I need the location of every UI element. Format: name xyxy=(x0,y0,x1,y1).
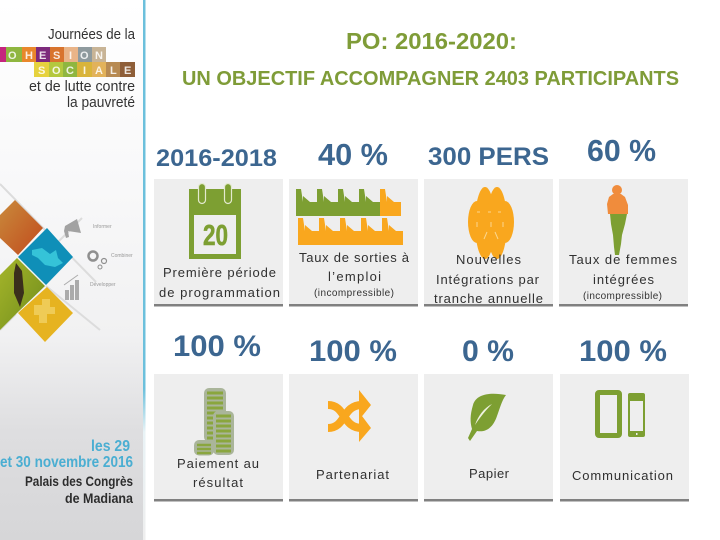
label xyxy=(177,456,259,490)
label xyxy=(299,250,410,299)
logo blocks: sociale: C xyxy=(66,65,74,77)
event logo xyxy=(0,26,136,111)
icon: group of people xyxy=(468,187,514,259)
panel: left sidebar xyxy=(0,0,146,540)
puzzle diamond: yellow xyxy=(18,287,73,342)
title: PO: 2016-2020: xyxy=(346,28,517,54)
icon: coin stacks xyxy=(194,388,234,456)
logo blocks: sociale xyxy=(34,62,135,77)
heading: 100 % paiement: 100 % xyxy=(173,330,261,363)
label: Partenariat xyxy=(316,467,389,482)
heading: 0 % papier: 0 % xyxy=(462,335,514,368)
logo blocks: sociale: A xyxy=(95,65,103,77)
label: (incompressible) xyxy=(583,291,662,302)
icon: leaf xyxy=(468,394,506,441)
icon: factories xyxy=(296,189,403,245)
logo blocks: sociale: O xyxy=(52,65,61,77)
logo heading: Journées de la xyxy=(48,26,136,43)
logo blocks: sociale: I xyxy=(83,65,86,77)
label: Communication xyxy=(572,468,673,483)
label: Intégrations par xyxy=(436,272,540,287)
label: Nouvelles xyxy=(456,252,522,267)
panel: première période xyxy=(154,179,283,306)
logo blocks: cohésion: H xyxy=(25,50,33,62)
icon: gears xyxy=(88,252,106,269)
logo blocks: cohésion: S xyxy=(53,50,60,62)
icon: calendar: 20 xyxy=(203,220,228,252)
label: combiner: Combiner xyxy=(111,253,133,259)
event date and venue xyxy=(0,438,133,506)
heading: 2016-2018: 2016-2018 xyxy=(156,145,277,172)
logo blocks: sociale: E xyxy=(124,65,131,77)
logo blocks: cohésion: I xyxy=(69,50,72,62)
label xyxy=(569,252,678,302)
date: les 29 xyxy=(91,438,130,455)
venue: de Madiana xyxy=(65,490,133,506)
date: et 30 novembre 2016 xyxy=(0,454,133,471)
icon: megaphone xyxy=(64,219,81,238)
sidebar diamond graphic xyxy=(0,184,133,342)
label: résultat xyxy=(193,475,243,490)
logo subtitle xyxy=(29,78,135,111)
panel: paiement au résultat xyxy=(154,374,283,502)
label: Taux de sorties à xyxy=(299,250,410,265)
icon: shuffle arrows xyxy=(328,390,371,442)
label: (incompressible) xyxy=(314,288,394,299)
photo diamond: green xyxy=(0,258,45,330)
label: Taux de femmes xyxy=(569,252,678,267)
date xyxy=(0,438,133,471)
label: tranche annuelle xyxy=(434,291,543,306)
subtitle: UN OBJECTIF ACCOMPAGNER 2403 PARTICIPANTS xyxy=(182,68,679,90)
label xyxy=(434,252,543,306)
map diamond: blue xyxy=(18,228,73,285)
logo blocks: cohésion xyxy=(0,47,106,62)
panel: papier xyxy=(424,374,553,502)
logo subtitle: et de lutte contre xyxy=(29,78,135,95)
icon: woman figure xyxy=(607,185,628,255)
heading: 40 %: 40 % xyxy=(318,137,388,172)
panel: nouvelles intégrations xyxy=(424,179,553,306)
label: de programmation xyxy=(159,285,280,300)
heading: 300 PERS: 300 PERS xyxy=(428,143,549,171)
label xyxy=(159,265,280,300)
label: Papier xyxy=(469,466,510,481)
label: intégrées xyxy=(593,272,654,287)
logo blocks: cohésion: N xyxy=(95,50,103,62)
panel: partenariat xyxy=(289,374,418,502)
logo subtitle: la pauvreté xyxy=(67,94,135,111)
venue: Palais des Congrès xyxy=(25,473,133,489)
label: informer: Informer xyxy=(93,224,112,230)
label: l’emploi xyxy=(328,269,381,284)
logo blocks: sociale: S xyxy=(38,65,45,77)
label: Paiement au xyxy=(177,456,259,471)
label: développer: Développer xyxy=(90,282,116,288)
photo diamond: hands xyxy=(0,200,43,255)
heading: 100 % communication: 100 % xyxy=(579,335,667,368)
icon: growth chart xyxy=(64,275,79,300)
panel: communication xyxy=(560,374,689,502)
logo blocks: cohésion: O xyxy=(80,50,89,62)
venue xyxy=(25,473,133,506)
panel: taux de femmes xyxy=(559,179,688,306)
heading: 60 %: 60 % xyxy=(587,133,656,168)
logo blocks: sociale: L xyxy=(110,65,117,77)
label: Première période xyxy=(163,265,276,280)
logo blocks: cohésion: O xyxy=(8,50,17,62)
panel: taux de sorties xyxy=(289,179,418,306)
heading: 100 % partenariat: 100 % xyxy=(309,335,397,368)
logo blocks: cohésion: E xyxy=(39,50,46,62)
icon: tablet and phone xyxy=(598,392,645,437)
